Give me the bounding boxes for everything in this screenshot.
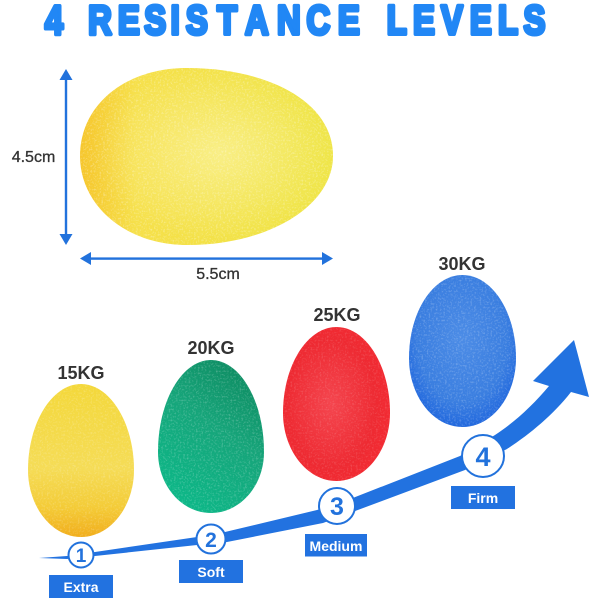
step 1 tag: Extra: Extra: [63, 579, 99, 595]
blue egg: 30KG: [409, 275, 516, 427]
step 3 marker: 3: [330, 493, 344, 521]
step 2 tag: Soft: Soft: [197, 564, 225, 580]
step 2 marker: 2: [205, 529, 217, 552]
step 3 tag: Medium: [305, 534, 367, 556]
label: 15KG: 15KG: [57, 363, 105, 383]
label: 25KG: 25KG: [313, 305, 361, 325]
width dimension arrow: [80, 252, 333, 265]
growth arrow: [39, 340, 589, 559]
step 3 tag: Medium: Medium: [310, 538, 362, 554]
step 1 marker: [68, 542, 94, 568]
height dimension arrow: [60, 69, 72, 245]
large yellow egg: [80, 68, 333, 245]
step 1 marker: 1: [76, 546, 87, 567]
green egg: 20KG: [158, 360, 264, 513]
step 2 marker: [196, 524, 226, 554]
step 2 tag: Soft: [179, 560, 243, 583]
step 3 marker: [319, 488, 355, 524]
yellow egg: 15KG: [28, 384, 134, 537]
step 4 marker: [462, 435, 504, 477]
step 4 tag: Firm: [451, 486, 515, 509]
label: 30KG: 30KG: [438, 254, 486, 274]
width label: 5.5cm: [196, 266, 240, 283]
label: 20KG: 20KG: [187, 338, 235, 358]
step 4 tag: Firm: Firm: [468, 490, 498, 506]
step 1 tag: Extra: [49, 575, 113, 598]
height label: 4.5cm: [12, 149, 55, 166]
step 4 marker: 4: [475, 442, 491, 472]
red egg: 25KG: [283, 327, 390, 481]
